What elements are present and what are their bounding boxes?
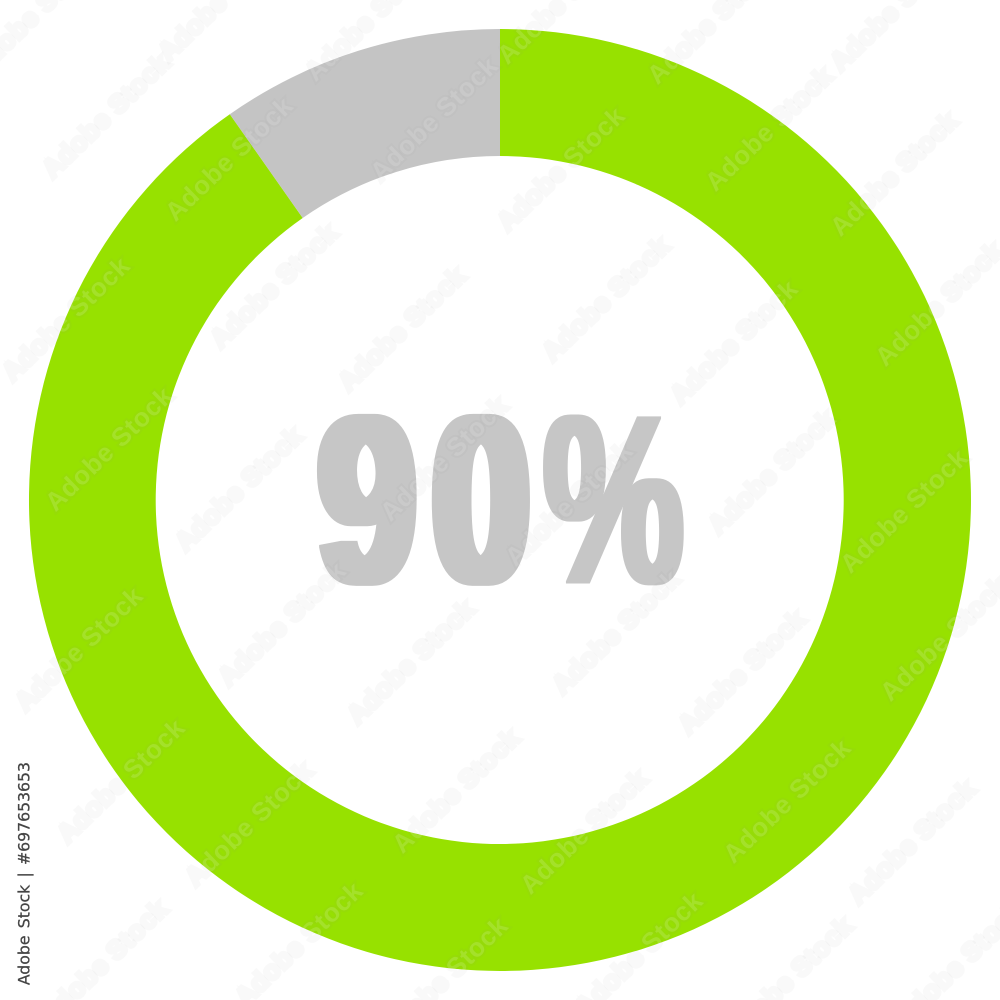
stock watermark pattern: Adobe Stock xyxy=(212,555,352,692)
stock watermark pattern: Adobe Stock xyxy=(179,755,319,892)
stock watermark pattern: Adobe Stock xyxy=(834,442,974,579)
percent sign: % xyxy=(543,367,684,634)
stock watermark pattern: Adobe Stock xyxy=(491,100,631,237)
stock watermark pattern: Adobe Stock xyxy=(702,403,842,540)
stock watermark pattern: Adobe Stock xyxy=(341,593,481,730)
stock watermark pattern: Adobe Stock xyxy=(824,105,964,242)
stock watermark pattern: Adobe Stock xyxy=(36,47,176,184)
stock watermark pattern: Adobe Stock xyxy=(499,435,639,572)
stock watermark pattern: Adobe Stock xyxy=(374,390,514,527)
digits 90: 9 xyxy=(319,367,415,634)
stock watermark pattern: Adobe Stock xyxy=(364,50,504,187)
stock watermark pattern: Adobe Stock xyxy=(672,603,812,740)
stock watermark pattern: Adobe Stock xyxy=(664,273,804,410)
digits 90 xyxy=(319,367,529,634)
stock watermark pattern: Adobe Stock xyxy=(39,380,179,517)
stock watermark pattern: Adobe Stock xyxy=(204,217,344,354)
stock watermark pattern: Adobe Stock xyxy=(159,90,299,227)
stock watermark pattern: Adobe Stock xyxy=(386,722,526,859)
stock watermark pattern: Adobe Stock xyxy=(536,230,676,367)
stock watermark pattern: Adobe Stock xyxy=(546,563,686,700)
stock watermark pattern: Adobe Stock xyxy=(51,712,191,849)
stock watermark pattern: Adobe Stock xyxy=(699,60,839,197)
stock watermark pattern: Adobe Stock xyxy=(717,732,857,869)
stock watermark pattern: Adobe Stock xyxy=(514,763,654,900)
gray remainder segment xyxy=(230,29,500,218)
stock watermark pattern: Adobe Stock xyxy=(9,580,149,717)
digits 90: 0 xyxy=(433,367,529,634)
stock watermark pattern: Adobe Stock xyxy=(169,420,309,557)
stock watermark pattern: Adobe Stock xyxy=(842,773,982,910)
vertical stock id text: Adobe Stock | #697653653 xyxy=(14,762,34,985)
stock watermark pattern: Adobe Stock xyxy=(332,260,472,397)
center label: 90% xyxy=(319,367,684,634)
